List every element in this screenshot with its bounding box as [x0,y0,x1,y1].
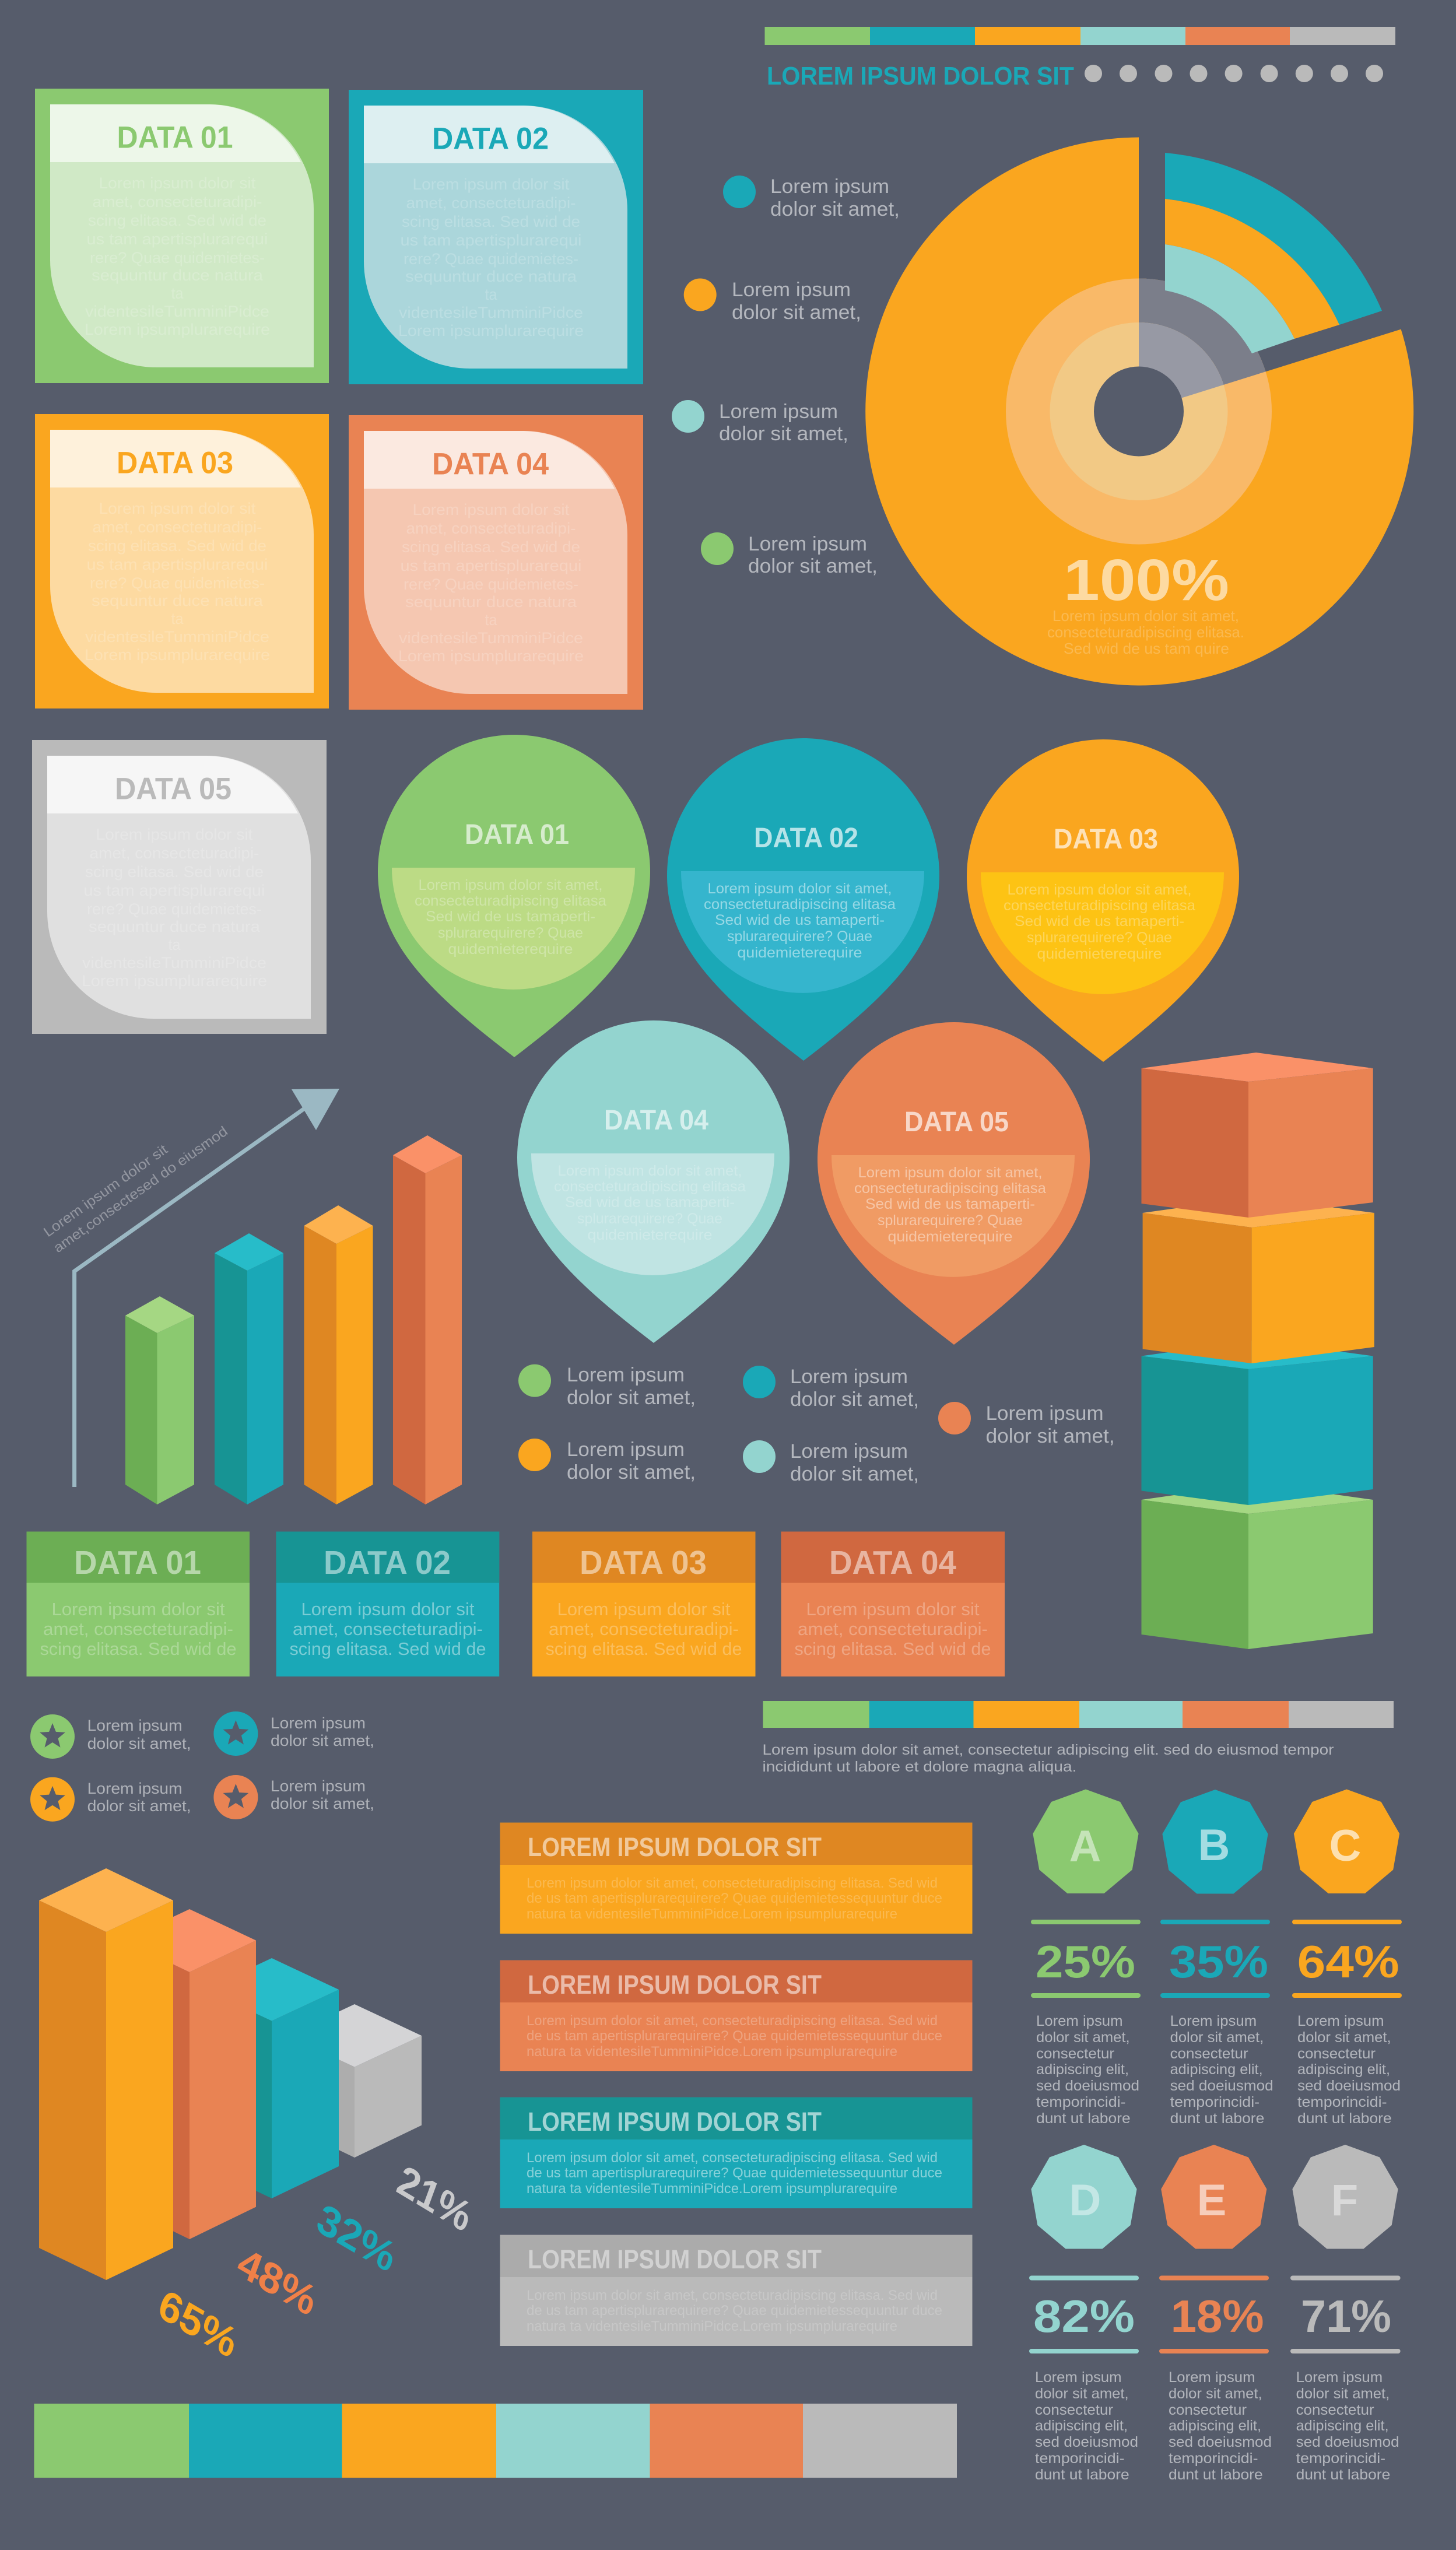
card 04 body text [398,501,584,665]
pin 01: green [378,735,650,1057]
legend: orange [518,1439,696,1483]
arrow caption: amet,consectesed do eiusmod [51,1123,231,1256]
3d bar chart [125,1135,462,1504]
bar: orange [304,1205,373,1504]
data box 01: amet, consecteturadipi- [43,1619,233,1639]
badge E [1161,2145,1266,2249]
card 04 body text: scing elitasa. Sed wid de [402,538,580,556]
badge D [1031,2145,1137,2249]
pie legend [672,176,900,577]
card 02 body text: Lorem ipsum dolor sit [413,176,570,193]
pin 03: orange: consecteturadipiscing elitasa [1004,897,1195,914]
card 05 body text: ta [168,936,181,953]
pin 04: mint: quidemieterequire [588,1227,713,1243]
description A [1036,2013,1139,2127]
pin 05: coral: quidemieterequire [887,1229,1012,1245]
card 03 title: DATA 03 [117,446,233,480]
card 03 body text: rere? Quae quidemietes- [90,574,265,592]
badge B: B [1198,1821,1230,1870]
pin 04: mint: Lorem ipsum dolor sit amet, [557,1163,742,1179]
data box 04: scing elitasa. Sed wid de [794,1639,991,1659]
description A: adipiscing elit, [1036,2061,1129,2078]
isometric bar chart [39,1868,422,2280]
row of grey dots [1085,65,1383,82]
card 04 body text: rere? Quae quidemietes- [404,576,578,593]
legend: teal: Lorem ipsum [790,1366,908,1388]
data box 02 [276,1531,499,1676]
pie chart [865,138,1413,685]
centre hole [1094,366,1184,456]
card 04 body text: Lorem ipsum dolor sit [413,501,570,518]
card 04 body text: videntesileTumminiPidce [399,629,583,647]
main orange slice [865,138,1413,685]
legend item: orange: dolor sit amet, [732,301,861,324]
description D: dolor sit amet, [1035,2386,1129,2402]
iso bar: teal [205,1958,339,2198]
description F: dolor sit amet, [1296,2386,1390,2402]
card 01 body text: rere? Quae quidemietes- [90,249,265,266]
data box 01 [27,1531,250,1676]
intro paragraph: incididunt ut labore et dolore magna aliqua. [763,1759,1076,1775]
card 01 body text: ta [171,285,184,302]
description A: dolor sit amet, [1036,2029,1130,2046]
description F: consectetur [1296,2402,1374,2418]
legend item: green: Lorem ipsum [748,533,867,555]
description E [1169,2369,1272,2483]
card 02 body text: amet, consecteturadipi- [406,194,576,212]
data box 02: amet, consecteturadipi- [293,1619,483,1639]
card 04 body text: ta [485,611,497,629]
data box 03: DATA 03 [580,1544,707,1581]
text panel: teal: Lorem ipsum dolor sit amet, consecteturadipiscing elitasa. Sed wid [527,2150,938,2166]
text panel: coral: natura ta videntesileTumminiPidce.Lorem ipsumplurarequire [527,2044,897,2060]
pin 04: mint: consecteturadipiscing elitasa [554,1178,746,1195]
heading: lorem ipsum dolor sit: LOREM IPSUM DOLOR SIT [767,62,1074,90]
card 05 body text [82,826,267,990]
data box 03: scing elitasa. Sed wid de [546,1639,742,1659]
cube: green [1142,1483,1373,1649]
pie caption: Sed wid de us tam quire [1064,640,1229,657]
legend item: green [701,532,878,577]
text panel: grey: de us tam apertisplurarequirere? Quae quidemietessequuntur duce [527,2303,942,2318]
card 05 body text: videntesileTumminiPidce [82,954,266,971]
text panel: teal: LOREM IPSUM DOLOR SIT [528,2107,822,2137]
value 35%: 35% [1169,1936,1268,1987]
pin 02: teal: Lorem ipsum dolor sit amet, [708,881,892,897]
description D: sed doeiusmod [1035,2434,1138,2450]
cube: orange [1143,1197,1374,1363]
badge D: D [1069,2176,1101,2225]
star item: coral [213,1775,374,1819]
card 01 title: DATA 01 [117,120,233,155]
legend: coral: dolor sit amet, [986,1425,1115,1447]
description C: sed doeiusmod [1297,2078,1401,2094]
pin 05: coral: Sed wid de us tamaperti- [865,1196,1035,1212]
stat A [1031,1789,1141,2127]
data box 02: DATA 02 [324,1544,451,1581]
card 04 body text: amet, consecteturadipi- [406,520,576,537]
pin 01: green: splurarequirere? Quae [438,925,583,941]
middle colour palette bar [763,1701,1394,1728]
pin 05: coral: splurarequirere? Quae [878,1212,1023,1229]
pin 03: orange: Sed wid de us tamaperti- [1015,913,1184,929]
badge B [1162,1790,1268,1894]
inner ring [1050,322,1228,500]
card 01 body text: sequuntur duce natura [92,266,264,284]
stacked 3d cubes [1142,1053,1374,1649]
card 02 body text: ta [485,286,497,303]
card 02 body text: rere? Quae quidemietes- [404,250,578,268]
text panel: orange: natura ta videntesileTumminiPidce.Lorem ipsumplurarequire [527,1906,897,1922]
badge C [1294,1789,1399,1893]
pin 03: orange: quidemieterequire [1037,946,1162,962]
card 03 body text: amet, consecteturadipi- [92,518,262,536]
data box 02: Lorem ipsum dolor sit [301,1599,475,1619]
card 04 body text: us tam apertisplurarequi [400,557,582,574]
value 25%: 25% [1036,1936,1135,1987]
description D: adipiscing elit, [1035,2418,1128,2434]
description E: temporincidi- [1169,2450,1258,2467]
card 02 body text: scing elitasa. Sed wid de [402,213,580,230]
text panel: orange: LOREM IPSUM DOLOR SIT [528,1832,822,1862]
pin 03: orange: DATA 03 [1054,824,1158,855]
text panel: teal: de us tam apertisplurarequirere? Quae quidemietessequuntur duce [527,2165,942,2181]
description B: dolor sit amet, [1170,2029,1264,2046]
card 03 body text: sequuntur duce natura [92,592,264,609]
card 03 body text: Lorem ipsum dolor sit [99,500,256,517]
stat B [1160,1790,1273,2127]
stat F [1290,2145,1401,2483]
star item: coral: Lorem ipsum [271,1777,366,1795]
description E: dunt ut labore [1169,2467,1263,2483]
card 05 title: DATA 05 [115,772,231,806]
description F: sed doeiusmod [1296,2434,1399,2450]
legend: coral: Lorem ipsum [986,1402,1104,1425]
pin 03: orange: Lorem ipsum dolor sit amet, [1008,882,1192,898]
card 03 body text [85,500,270,664]
text panel: grey [500,2235,973,2346]
card 01 body text: us tam apertisplurarequi [86,230,268,248]
pin 02: teal: DATA 02 [754,823,858,854]
description C: adipiscing elit, [1297,2061,1390,2078]
card 02 title: DATA 02 [432,121,549,156]
star item: teal: Lorem ipsum [271,1714,366,1732]
pie caption: Lorem ipsum dolor sit amet, [1052,607,1239,625]
text panel: orange: de us tam apertisplurarequirere? Quae quidemietessequuntur duce [527,1890,942,1906]
description E: consectetur [1169,2402,1247,2418]
data box 01: Lorem ipsum dolor sit [51,1599,225,1619]
percentage: 100%: 100% [1064,548,1229,613]
bar: green [125,1296,194,1504]
iso percentages: 48% [232,2238,322,2325]
legend: orange: dolor sit amet, [567,1461,696,1483]
card 01 body text: amet, consecteturadipi- [92,193,262,211]
top colour palette bar [765,27,1395,45]
description C: Lorem ipsum [1297,2013,1384,2029]
iso percentages: 65% [153,2280,243,2367]
pin 04: mint: DATA 04 [604,1105,708,1136]
iso percentages: 32% [311,2194,402,2282]
legend: teal: dolor sit amet, [790,1388,919,1411]
data box 04: amet, consecteturadipi- [798,1619,988,1639]
description C [1297,2013,1401,2127]
legend: orange: Lorem ipsum [567,1439,685,1461]
iso bar: grey [287,2004,422,2158]
card 03 body text: ta [171,610,184,627]
data box 04: DATA 04 [829,1544,956,1581]
legend item: teal: dolor sit amet, [770,198,900,220]
description D: dunt ut labore [1035,2467,1129,2483]
description D: temporincidi- [1035,2450,1124,2467]
description E: adipiscing elit, [1169,2418,1261,2434]
pin 03: orange [967,739,1239,1062]
outer ring grey sector [1139,279,1266,412]
card 01 body text: videntesileTumminiPidce [85,303,269,320]
star item: green: dolor sit amet, [87,1735,191,1752]
data box 01: DATA 01 [74,1544,201,1581]
badge A [1033,1789,1139,1893]
data box 03 [532,1531,756,1676]
legend item: mint [672,400,848,445]
legend item: teal [723,176,900,220]
value 64%: 64% [1297,1936,1399,1987]
star legend [30,1711,374,1822]
data box 03: amet, consecteturadipi- [549,1619,739,1639]
card 01 body text [85,174,270,338]
description C: temporincidi- [1297,2094,1387,2110]
pin 04: mint: Sed wid de us tamaperti- [565,1194,735,1211]
description E: sed doeiusmod [1169,2434,1272,2450]
description B: Lorem ipsum [1170,2013,1257,2029]
cube: coral [1142,1053,1373,1218]
star item: orange: Lorem ipsum [87,1780,183,1797]
data box 03: Lorem ipsum dolor sit [557,1599,731,1619]
pin 03: orange: splurarequirere? Quae [1027,929,1172,946]
iso bar: orange [39,1868,173,2280]
pin 04: mint: splurarequirere? Quae [577,1211,722,1227]
legend: mint [743,1440,919,1485]
star item: orange: dolor sit amet, [87,1797,191,1815]
description F: Lorem ipsum [1296,2369,1383,2386]
description F [1296,2369,1399,2483]
stat E [1159,2145,1272,2483]
stat D [1029,2145,1139,2483]
pin 02: teal [667,738,939,1061]
panel: data card 04 [349,415,643,710]
legend: green [518,1364,696,1409]
star item: teal [213,1711,374,1756]
card 04 title: DATA 04 [432,447,549,482]
pin 02: teal: quidemieterequire [737,945,862,961]
card 05 body text: Lorem ipsumplurarequire [82,972,267,990]
description E: dolor sit amet, [1169,2386,1262,2402]
panel: data card 03 [35,414,329,708]
bar: teal [215,1233,283,1504]
description F: temporincidi- [1296,2450,1385,2467]
panel: data card 05 [32,740,327,1034]
description E: Lorem ipsum [1169,2369,1255,2386]
bottom colour palette bar [34,2404,957,2478]
pin 01: green: quidemieterequire [448,941,573,957]
description F: adipiscing elit, [1296,2418,1389,2434]
card 03 body text: us tam apertisplurarequi [86,556,268,573]
pin 05: coral [818,1022,1090,1345]
description A: temporincidi- [1036,2094,1125,2110]
card 02 body text: sequuntur duce natura [405,268,577,285]
description A: dunt ut labore [1036,2110,1131,2127]
pin legend [518,1364,1115,1485]
legend: mint: dolor sit amet, [790,1463,919,1485]
pie caption [1047,607,1244,657]
star item: green: Lorem ipsum [87,1717,183,1734]
card 04 body text: Lorem ipsumplurarequire [398,647,584,665]
card 05 body text: scing elitasa. Sed wid de [85,863,264,881]
pin 01: green: Lorem ipsum dolor sit amet, [419,877,603,893]
text panel: coral [500,1960,973,2071]
pie caption: consecteturadipiscing elitasa. [1047,623,1244,641]
data box 04: Lorem ipsum dolor sit [806,1599,980,1619]
pin 01: green: DATA 01 [465,819,569,850]
panel: data card 02 [349,90,643,384]
description C: consectetur [1297,2046,1376,2062]
text panel: coral: Lorem ipsum dolor sit amet, consecteturadipiscing elitasa. Sed wid [527,2013,938,2029]
description C: dolor sit amet, [1297,2029,1391,2046]
pin 02: teal: splurarequirere? Quae [727,928,872,945]
pin 05: coral: consecteturadipiscing elitasa [854,1180,1046,1197]
legend: coral [938,1402,1115,1447]
value 82%: 82% [1033,2291,1135,2342]
card 05 body text: Lorem ipsum dolor sit [96,826,253,843]
legend item: mint: Lorem ipsum [719,401,838,423]
card 02 body text: videntesileTumminiPidce [399,304,583,321]
star item: orange [30,1777,191,1822]
iso bar: coral [123,1909,256,2239]
text panel: orange [500,1823,973,1934]
card 03 body text: Lorem ipsumplurarequire [85,646,270,664]
pin 01: green: Sed wid de us tamaperti- [426,909,595,925]
pin 04: mint [517,1020,790,1343]
pin 05: coral: DATA 05 [904,1107,1009,1138]
intro paragraph [763,1742,1334,1775]
iso percentages [153,2155,478,2367]
card 02 body text: Lorem ipsumplurarequire [398,322,584,339]
legend: teal [743,1366,919,1411]
pin 02: teal: consecteturadipiscing elitasa [704,896,896,913]
legend: green: dolor sit amet, [567,1387,696,1409]
pin 01: green: consecteturadipiscing elitasa [415,893,606,909]
text panel: coral: LOREM IPSUM DOLOR SIT [528,1970,822,2000]
badge F: F [1331,2176,1358,2225]
panel: data card 01 [35,89,329,383]
star item: green [30,1714,191,1759]
legend item: orange [684,279,861,324]
description A: consectetur [1036,2046,1114,2062]
text panel: grey: Lorem ipsum dolor sit amet, consecteturadipiscing elitasa. Sed wid [527,2288,938,2303]
legend: green: Lorem ipsum [567,1364,685,1386]
description D: consectetur [1035,2402,1113,2418]
badge F [1292,2145,1398,2249]
card 01 body text: Lorem ipsumplurarequire [85,321,270,338]
text panel: grey: natura ta videntesileTumminiPidce.Lorem ipsumplurarequire [527,2318,897,2334]
badge E: E [1197,2176,1226,2225]
star item: teal: dolor sit amet, [271,1732,374,1749]
description B [1170,2013,1273,2127]
description D [1035,2369,1138,2483]
data box 04 [781,1531,1005,1676]
badge A: A [1069,1822,1101,1871]
data box 01: scing elitasa. Sed wid de [40,1639,237,1659]
card 05 body text: rere? Quae quidemietes- [87,900,262,918]
card 02 body text: us tam apertisplurarequi [400,232,582,249]
outer ring [1006,279,1272,545]
card 04 body text: sequuntur duce natura [405,593,577,611]
text panel: teal: natura ta videntesileTumminiPidce.Lorem ipsumplurarequire [527,2181,897,2197]
description C: dunt ut labore [1297,2110,1392,2127]
value 71%: 71% [1301,2291,1391,2342]
arrow caption: Lorem ipsum dolor sit [41,1142,171,1240]
description D: Lorem ipsum [1035,2369,1122,2386]
pin 02: teal: Sed wid de us tamaperti- [715,912,885,928]
pin 05: coral: Lorem ipsum dolor sit amet, [858,1164,1043,1181]
description B: dunt ut labore [1170,2110,1264,2127]
inner ring grey sector [1139,322,1223,412]
description F: dunt ut labore [1296,2467,1390,2483]
card 01 body text: scing elitasa. Sed wid de [88,212,266,229]
star item: coral: dolor sit amet, [271,1795,374,1812]
description B: temporincidi- [1170,2094,1259,2110]
description B: consectetur [1170,2046,1248,2062]
data box 02: scing elitasa. Sed wid de [289,1639,486,1659]
teal arc [1165,153,1382,325]
card 03 body text: videntesileTumminiPidce [85,628,269,646]
description B: adipiscing elit, [1170,2061,1263,2078]
iso percentages: 21% [392,2155,478,2241]
text panel: teal [500,2097,973,2208]
card 05 body text: amet, consecteturadipi- [90,844,259,862]
card 02 body text [398,176,584,339]
legend item: mint: dolor sit amet, [719,423,848,445]
legend item: orange: Lorem ipsum [732,279,851,301]
badge C: C [1329,1821,1361,1871]
description B: sed doeiusmod [1170,2078,1273,2094]
legend item: green: dolor sit amet, [748,555,878,577]
text panel: orange: Lorem ipsum dolor sit amet, consecteturadipiscing elitasa. Sed wid [527,1875,938,1891]
stat C [1292,1789,1402,2127]
orange arc [1165,199,1339,339]
text panel: grey: LOREM IPSUM DOLOR SIT [528,2244,822,2274]
mint arc [1165,244,1294,353]
intro paragraph: Lorem ipsum dolor sit amet, consectetur adipiscing elit. sed do eiusmod tempor [763,1742,1334,1758]
card 05 body text: us tam apertisplurarequi [84,882,265,899]
description A: sed doeiusmod [1036,2078,1139,2094]
card 01 body text: Lorem ipsum dolor sit [99,174,256,192]
legend: mint: Lorem ipsum [790,1440,908,1462]
cube: teal [1142,1340,1373,1505]
bar: coral [393,1135,462,1504]
arrow: growth trend [75,1089,339,1487]
text panel: coral: de us tam apertisplurarequirere? Quae quidemietessequuntur duce [527,2028,942,2044]
card 05 body text: sequuntur duce natura [89,918,261,935]
card 03 body text: scing elitasa. Sed wid de [88,537,266,555]
description A: Lorem ipsum [1036,2013,1123,2029]
value 18%: 18% [1171,2291,1264,2342]
legend item: teal: Lorem ipsum [770,176,889,198]
